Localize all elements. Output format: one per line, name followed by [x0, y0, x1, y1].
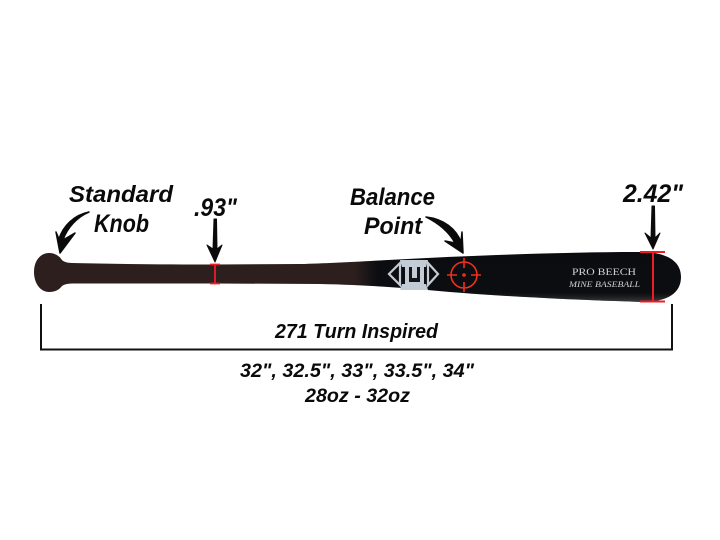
- barrel text: MINE BASEBALL: [568, 279, 640, 289]
- length bracket: [41, 304, 672, 350]
- red handle diameter marker: [210, 264, 220, 284]
- arrow: to barrel: [645, 206, 660, 249]
- label: weights: 28oz - 32oz: [304, 386, 411, 407]
- logo: [389, 260, 438, 290]
- label: Standard Knob: [69, 181, 174, 238]
- balance point crosshair: [447, 258, 481, 292]
- arrow: to knob: [56, 212, 89, 253]
- label: Balance Point: Point: [364, 213, 423, 240]
- label: Standard Knob: Standard: [69, 181, 174, 207]
- label: lengths: 32", 32.5", 33", 33.5", 34": [240, 361, 475, 382]
- label: turn model: 271 Turn Inspired: [274, 321, 439, 343]
- arrow: to handle: [207, 219, 222, 262]
- label: Balance Point: [350, 184, 435, 240]
- label: handle diameter: .93": [194, 194, 238, 222]
- red barrel diameter marker: [640, 252, 665, 302]
- label: Balance Point: Balance: [350, 184, 435, 211]
- barrel text: PRO BEECH: [572, 268, 636, 278]
- label: barrel diameter: 2.42": [622, 180, 684, 208]
- label: Standard Knob: Knob: [94, 210, 149, 238]
- baseball bat: [34, 252, 681, 302]
- bat body: [34, 252, 681, 302]
- barrel text: [568, 268, 640, 289]
- arrow: to balance point: [426, 217, 463, 253]
- bat shading: [360, 252, 681, 302]
